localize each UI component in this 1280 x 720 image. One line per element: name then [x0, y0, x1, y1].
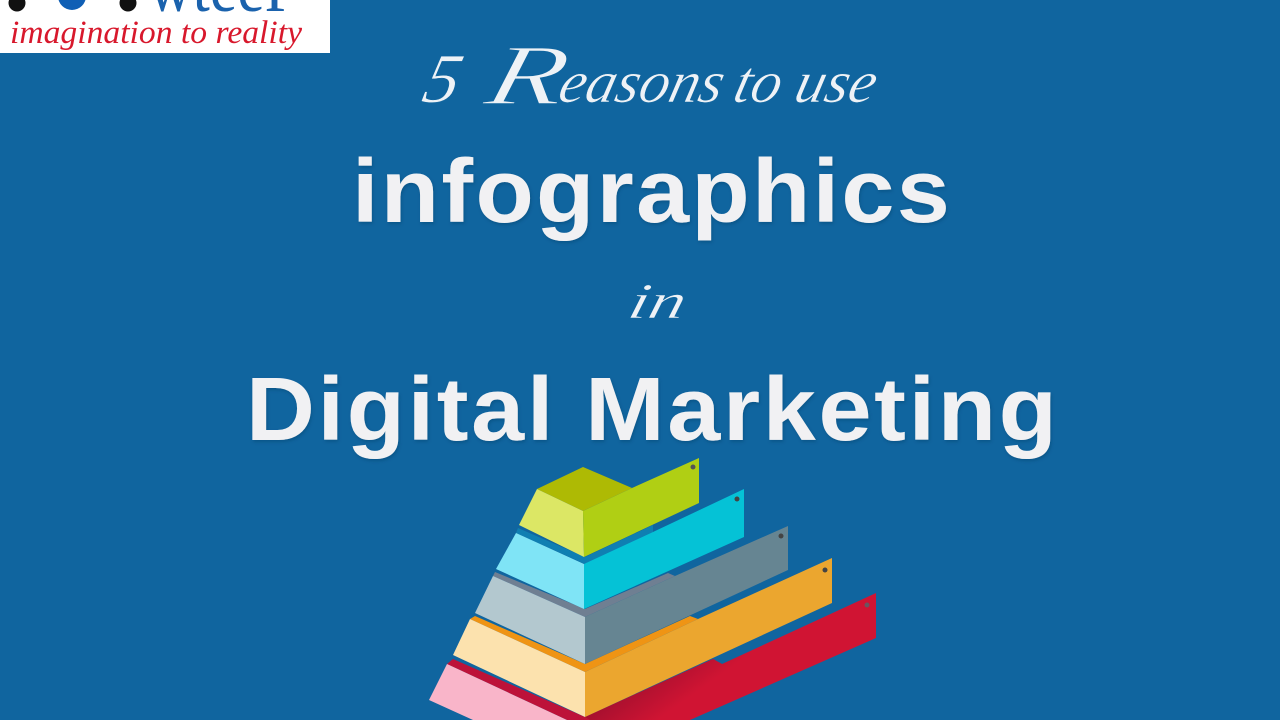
- logo tagline: imagination to reality: [10, 15, 302, 51]
- pyramid chart: [429, 458, 876, 720]
- heading: in: in: [623, 274, 693, 329]
- heading: 5 Reasons to use: [416, 27, 885, 123]
- heading: 5 Reasons to use: R: [476, 27, 579, 123]
- layer 3: gray: [475, 526, 788, 664]
- layer 4: orange: [453, 558, 832, 717]
- heading: 5 Reasons to use: to: [728, 50, 791, 116]
- layer 5: red: [429, 593, 876, 720]
- layer 1: green: [519, 458, 699, 557]
- heading: infographics: infographics: [352, 140, 950, 241]
- layer 2: cyan: [496, 489, 744, 609]
- heading: 5 Reasons to use: easons: [553, 50, 732, 116]
- heading: 5 Reasons to use: use: [789, 50, 885, 116]
- logo dots: [8, 0, 136, 12]
- heading: Digital Marketing: Digital Marketing: [246, 358, 1057, 459]
- logo: [0, 0, 330, 53]
- heading: 5 Reasons to use: 5: [416, 41, 470, 118]
